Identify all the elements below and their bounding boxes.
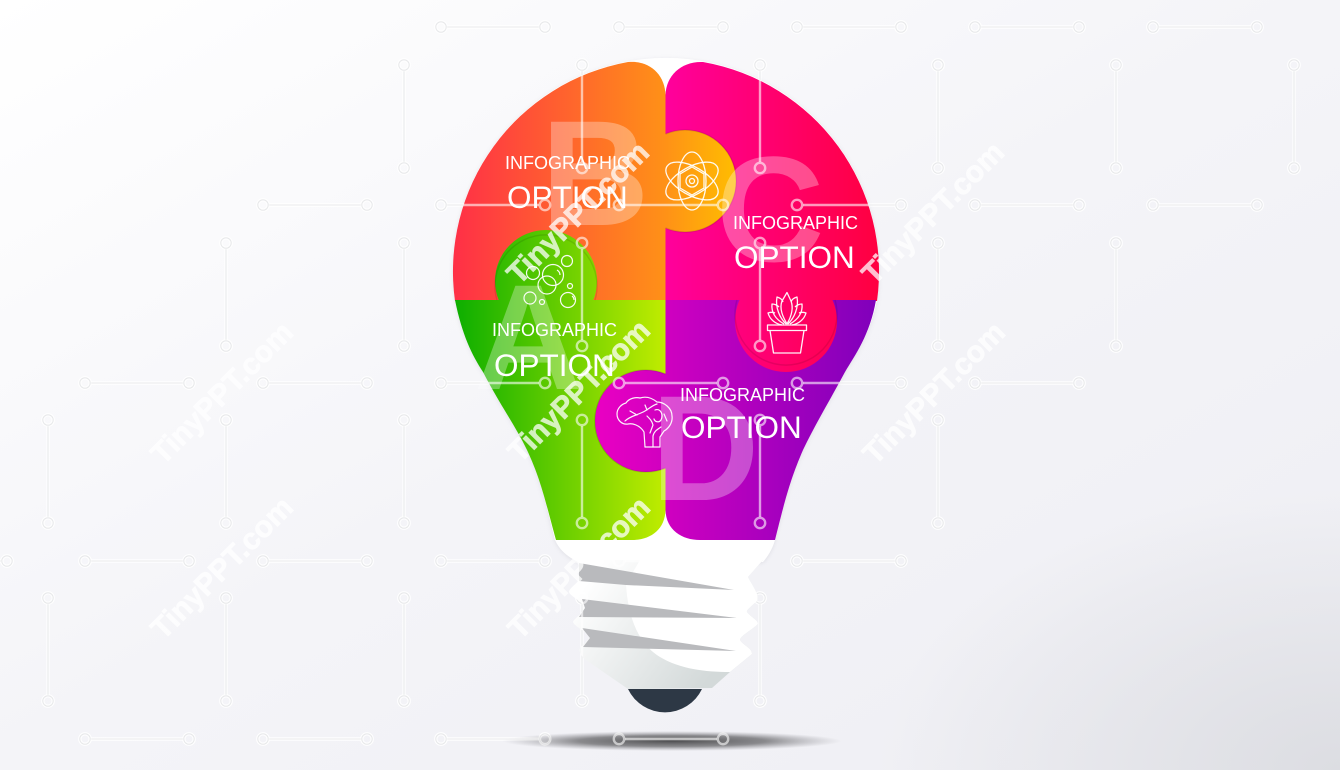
letter D: D [651, 364, 759, 532]
option label A [492, 320, 617, 383]
icon: potted plant [768, 292, 806, 353]
option label D [680, 385, 805, 445]
option label B: INFOGRAPHIC [505, 153, 630, 173]
piece C base [666, 62, 879, 301]
option label B [505, 153, 630, 215]
piece B base [453, 62, 666, 301]
white crescent highlight [626, 560, 763, 672]
puzzle knob A [495, 230, 597, 332]
watermarks: TinyPPT.com [857, 316, 1012, 471]
icon: brain [617, 397, 672, 447]
letter B: B [541, 89, 649, 257]
base contact [628, 689, 702, 712]
watermarks: TinyPPT.com [502, 491, 657, 646]
puzzle knob D [595, 370, 697, 472]
watermarks: TinyPPT.com [856, 136, 1011, 291]
option label C: INFOGRAPHIC [733, 213, 858, 233]
option label A: INFOGRAPHIC [492, 320, 617, 340]
option label C: OPTION [734, 239, 855, 275]
option label D: INFOGRAPHIC [680, 385, 805, 405]
watermarks: TinyPPT.com [145, 316, 300, 471]
option label D: OPTION [681, 409, 802, 445]
piece D base [666, 300, 876, 540]
watermarks: TinyPPT.com [145, 491, 300, 646]
base body [569, 560, 763, 689]
piece A base [455, 300, 666, 540]
light bulb glass silhouette [453, 58, 879, 562]
thread stripe 3 [582, 628, 736, 651]
thread stripe 2 [579, 599, 737, 618]
icon: bubbles [524, 256, 576, 308]
floor shadow [502, 731, 842, 751]
watermarks: TinyPPT.com [501, 136, 656, 291]
option label A: OPTION [494, 347, 615, 383]
letter C: C [716, 125, 824, 293]
option label C [733, 213, 858, 275]
watermarks: TinyPPT.com [502, 314, 657, 469]
icon: atom [660, 152, 724, 210]
watermarks [145, 136, 1012, 646]
thread stripe 1 [579, 563, 734, 590]
letter A: A [474, 253, 582, 421]
puzzle knob B [634, 130, 736, 232]
option label B: OPTION [507, 179, 628, 215]
puzzle knob C [735, 270, 837, 372]
screw base [569, 560, 763, 712]
